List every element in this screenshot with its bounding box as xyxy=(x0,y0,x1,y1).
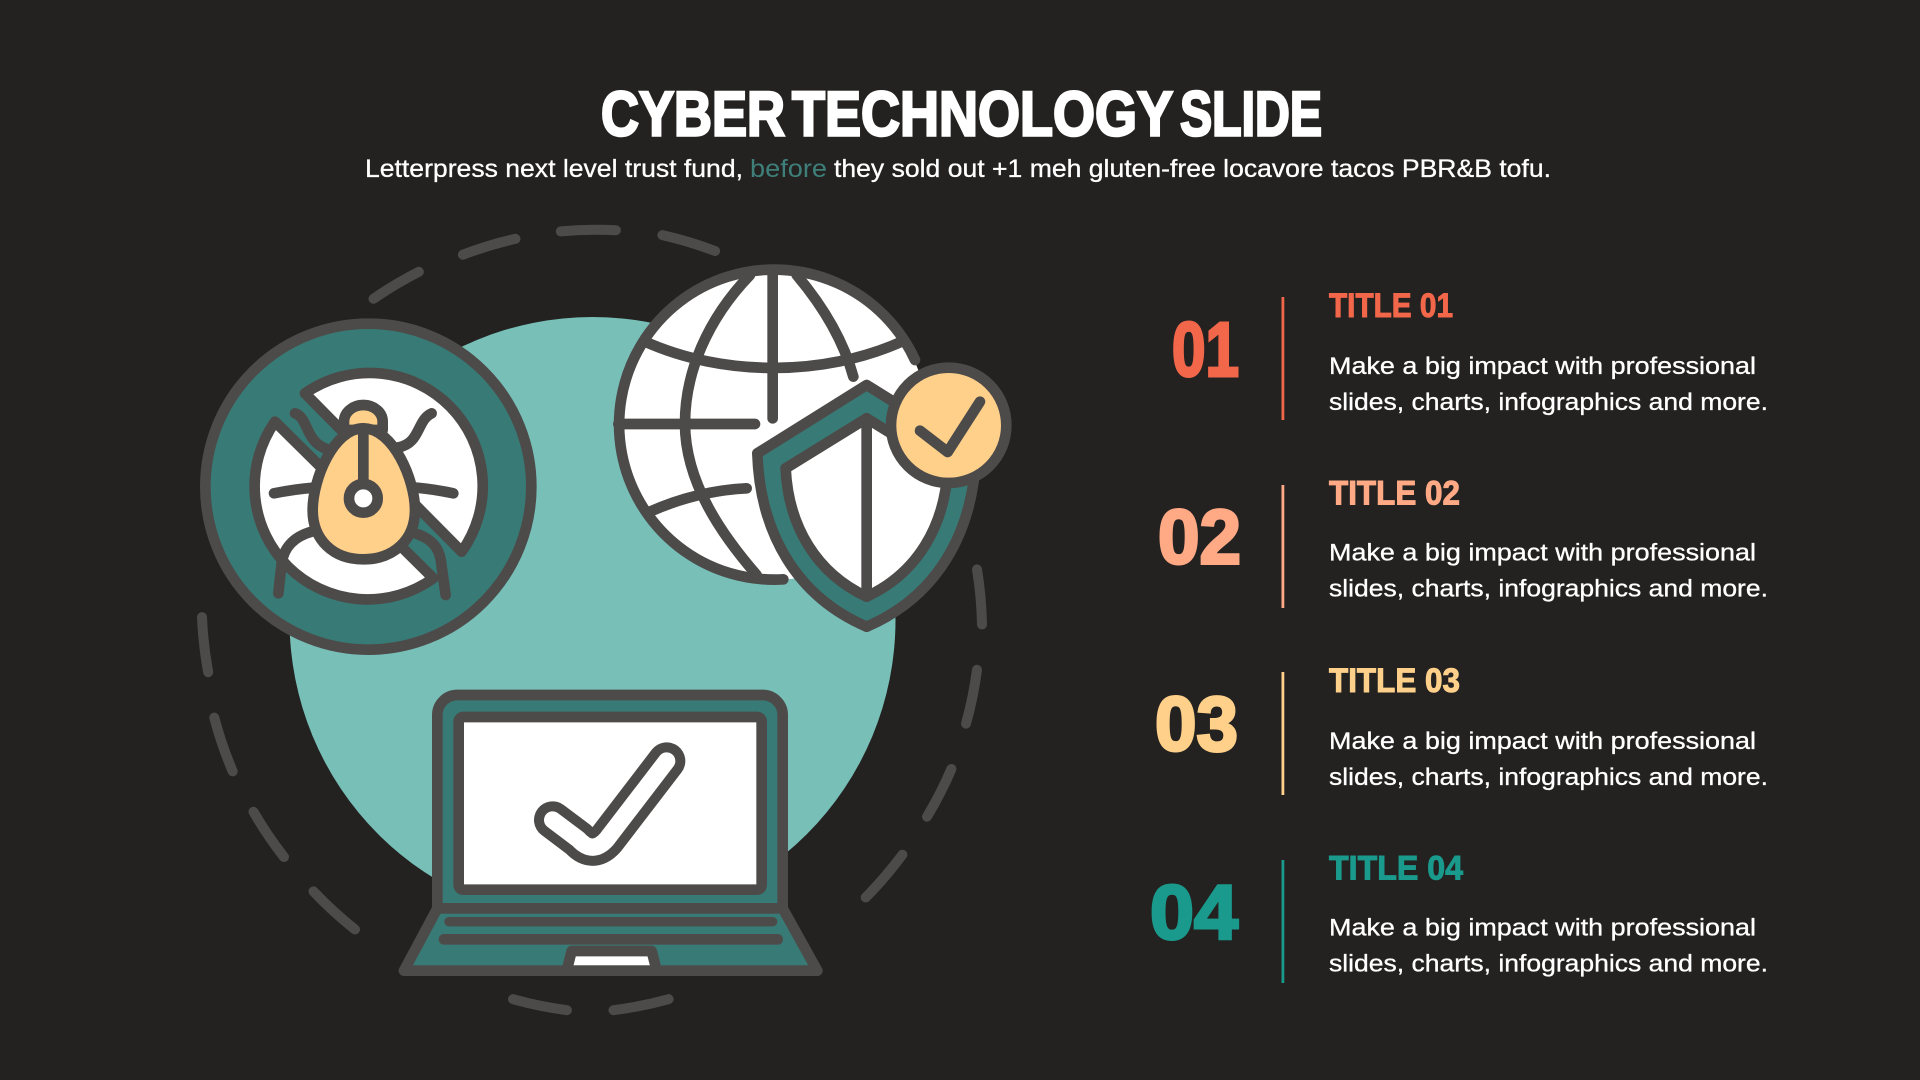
divider 04 xyxy=(1282,860,1284,983)
trackpad xyxy=(567,951,657,971)
shield inner xyxy=(786,418,948,597)
dashed ring xyxy=(202,230,982,1010)
divider 01 xyxy=(1282,297,1284,420)
description 01 xyxy=(1329,353,1768,416)
item 03 xyxy=(1155,662,1768,795)
globe fill xyxy=(618,270,928,580)
title: SLIDE xyxy=(1180,80,1322,150)
divider 02 xyxy=(1282,485,1284,608)
description 02: slides, charts, infographics and more. xyxy=(1329,576,1768,602)
check mark xyxy=(920,402,980,452)
title: CYBER xyxy=(601,80,785,150)
description 01: slides, charts, infographics and more. xyxy=(1329,389,1768,416)
description 04 xyxy=(1329,914,1768,978)
shield centre line xyxy=(851,418,883,597)
teal background circle xyxy=(290,317,896,923)
description 03: Make a big impact with professional xyxy=(1329,728,1756,755)
description 02: Make a big impact with professional xyxy=(1329,540,1756,566)
screen check inner xyxy=(553,761,667,847)
item 01 xyxy=(1172,287,1768,420)
bug spine and dot xyxy=(349,428,378,513)
title 02: TITLE 02 xyxy=(1329,474,1460,512)
title 01: TITLE 01 xyxy=(1329,287,1453,325)
laptop base xyxy=(404,908,817,971)
description 01: Make a big impact with professional xyxy=(1329,353,1756,380)
check badge xyxy=(891,368,1006,483)
item 04 xyxy=(1150,850,1768,983)
description 02 xyxy=(1329,540,1768,602)
white disc segments xyxy=(255,373,483,599)
bug legs xyxy=(274,413,453,595)
description 03: slides, charts, infographics and more. xyxy=(1329,764,1768,791)
globe grid lines xyxy=(618,270,902,575)
title 03: TITLE 03 xyxy=(1329,662,1460,700)
item 02 xyxy=(1158,474,1768,608)
bug head xyxy=(344,405,383,430)
title: TECHNOLOGY xyxy=(792,80,1173,150)
icon: globe with shield xyxy=(618,270,1006,627)
subtitle xyxy=(365,155,1551,183)
subtitle: before xyxy=(750,155,827,183)
bug body xyxy=(313,428,415,559)
number 03: 03 xyxy=(1155,682,1238,768)
subtitle: Letterpress next level trust fund, xyxy=(365,155,743,183)
divider 03 xyxy=(1282,672,1284,795)
screen check outline xyxy=(553,761,667,847)
subtitle: they sold out +1 meh gluten-free locavore tacos PBR&B tofu. xyxy=(834,155,1551,183)
icon: laptop with check xyxy=(404,695,817,971)
description 04: Make a big impact with professional xyxy=(1329,914,1756,942)
laptop screen xyxy=(459,717,762,890)
number 04: 04 xyxy=(1150,870,1238,956)
shield xyxy=(757,385,976,627)
description 03 xyxy=(1329,728,1768,791)
title xyxy=(601,80,1322,150)
globe outline xyxy=(619,270,915,580)
number 02: 02 xyxy=(1158,494,1241,580)
description 04: slides, charts, infographics and more. xyxy=(1329,950,1768,978)
bug badge ring xyxy=(205,324,531,650)
title 04: TITLE 04 xyxy=(1329,850,1463,888)
base front edge xyxy=(404,955,817,987)
number 01: 01 xyxy=(1172,307,1239,393)
keyboard bars xyxy=(444,922,778,939)
icon: prohibited bug xyxy=(205,324,531,650)
laptop lid xyxy=(437,695,783,908)
